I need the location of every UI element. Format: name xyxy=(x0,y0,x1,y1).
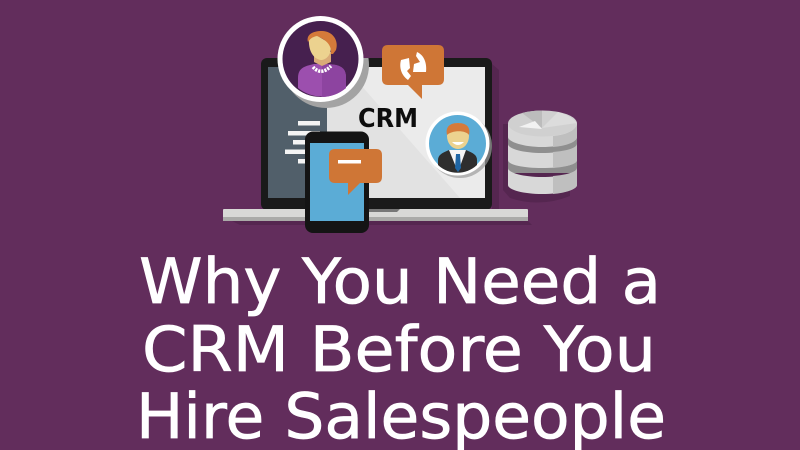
speech bubble: phone message xyxy=(329,149,382,195)
title: CRM Before You xyxy=(142,313,656,386)
CRM label: CRM xyxy=(358,104,418,134)
avatar: woman xyxy=(278,16,369,108)
sidebar lines xyxy=(285,121,320,164)
infographic canvas xyxy=(140,16,664,450)
speech bubble: phone call xyxy=(382,45,444,99)
laptop xyxy=(223,58,532,225)
title: Why You Need a xyxy=(139,245,661,318)
database icon xyxy=(503,110,577,203)
phone xyxy=(305,132,369,233)
avatar: man xyxy=(426,112,492,178)
title xyxy=(136,245,666,450)
